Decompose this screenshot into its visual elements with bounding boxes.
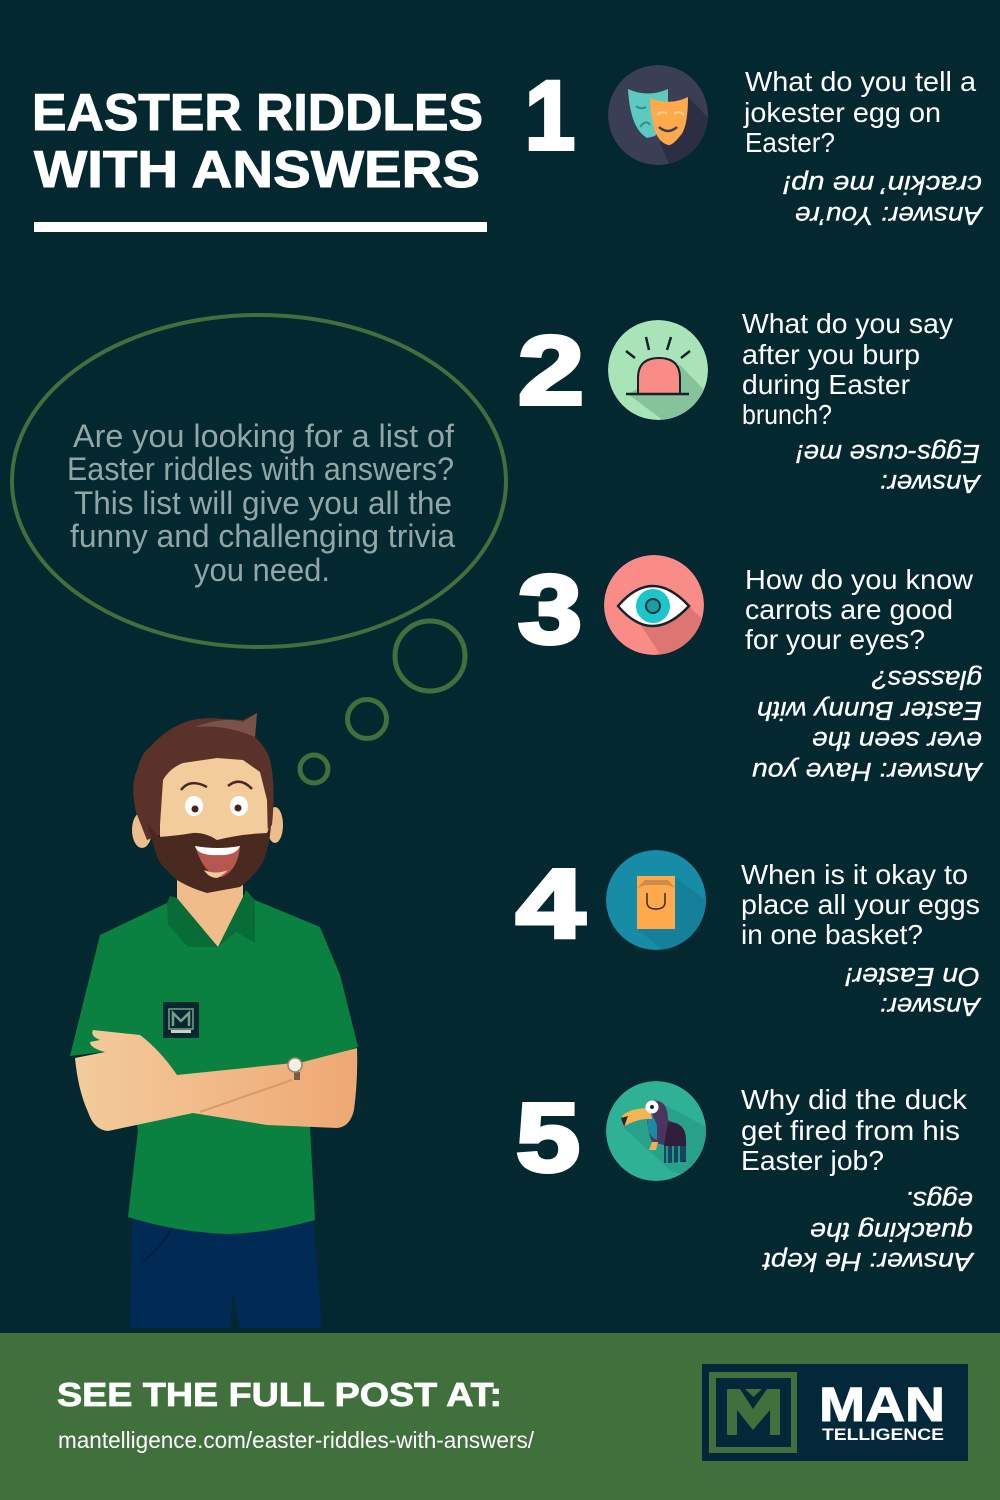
mouth [195,846,240,878]
riddle 4 [516,849,982,1022]
icon: shopping bag [606,850,712,954]
answer 1 upside down [783,170,984,231]
logo: TELLIGENCE [822,1425,944,1444]
answer 1 upside down: Answer: You’re [795,201,984,231]
hair [133,713,274,840]
trousers [130,1215,322,1328]
question 5: get fired from his [741,1115,960,1146]
answer 4 upside down: On Easter! [845,962,980,992]
answer 3 upside down: glasses? [871,665,982,695]
footer heading: SEE THE FULL POST AT: [57,1376,502,1413]
answer 2 upside down: Answer: [880,469,982,499]
question 5: Easter job? [741,1145,884,1176]
footer band [0,1333,1000,1500]
answer 3 upside down [752,665,984,787]
question 4 [741,859,980,950]
hair highlight [195,713,257,737]
intro text: Easter riddles with answers? [67,451,454,487]
answer 1 upside down: crackin’ me up! [783,170,982,200]
number 5: 5 [516,1083,580,1192]
face [160,758,268,842]
question 5: Why did the duck [741,1084,968,1115]
ears [132,807,283,848]
logo: MAN [819,1379,945,1432]
question 3 [745,564,974,655]
question 4: place all your eggs [741,889,980,920]
number 1: 1 [525,61,575,170]
answer 2 upside down: Eggs-cuse me! [796,439,980,469]
watch [288,1058,302,1080]
icon: theatre masks [608,65,708,165]
riddle 2 [518,308,982,499]
arms [75,1030,357,1131]
question 1: What do you tell a [745,66,976,97]
intro text: Are you looking for a list of [73,418,454,454]
eyes [181,782,252,816]
answer 3 upside down: Answer: Have you [752,757,984,787]
intro text: This list will give you all the [74,485,452,521]
collar [167,890,255,947]
question 2: during Easter [742,369,910,400]
number 3: 3 [518,555,582,664]
question 2 [742,308,953,430]
icon: siren [608,320,712,424]
number 2: 2 [518,316,584,425]
intro text: you need. [194,552,330,588]
question 3: carrots are good [745,594,953,625]
title: EASTER RIDDLES [32,84,483,142]
shirt [70,900,358,1234]
thought bubble [12,315,506,783]
question 1 [743,66,976,158]
question 4: When is it okay to [741,859,968,890]
question 3: for your eyes? [745,624,925,655]
number 4: 4 [516,849,585,958]
riddle 5 [516,1081,975,1277]
answer 5 upside down: Answer: He kept [761,1247,975,1277]
riddle 1 [525,61,984,231]
intro text [67,418,455,588]
logo [702,1364,968,1461]
title underline [34,222,487,232]
title [32,84,483,199]
question 3: How do you know [745,564,974,595]
riddle 3 [518,555,984,787]
question 4: in one basket? [741,919,923,950]
man illustration [70,713,358,1328]
intro text: funny and challenging trivia [70,518,455,554]
arm crease [200,1080,292,1112]
question 2: after you burp [742,339,920,370]
answer 5 upside down: eggs. [905,1186,973,1216]
answer 3 upside down: Easter Bunny with [757,696,982,726]
icon: eye [604,555,708,660]
footer url: mantelligence.com/easter-riddles-with-answers/ [58,1427,535,1453]
answer 4 upside down: Answer: [880,992,982,1022]
title: WITH ANSWERS [34,141,480,199]
question 1: jokester egg on [743,97,941,128]
answer 4 upside down [845,962,982,1022]
question 1: Easter? [745,127,835,158]
beard [147,823,271,893]
answer 5 upside down [761,1186,975,1277]
question 2: brunch? [742,399,832,430]
answer 3 upside down: ever seen the [812,726,982,756]
icon: toucan [606,1081,712,1185]
neck [177,875,243,947]
shirt badge [163,1002,199,1038]
answer 2 upside down [796,439,982,499]
answer 5 upside down: quacking the [810,1217,973,1247]
question 5 [741,1084,968,1176]
question 2: What do you say [742,308,953,339]
